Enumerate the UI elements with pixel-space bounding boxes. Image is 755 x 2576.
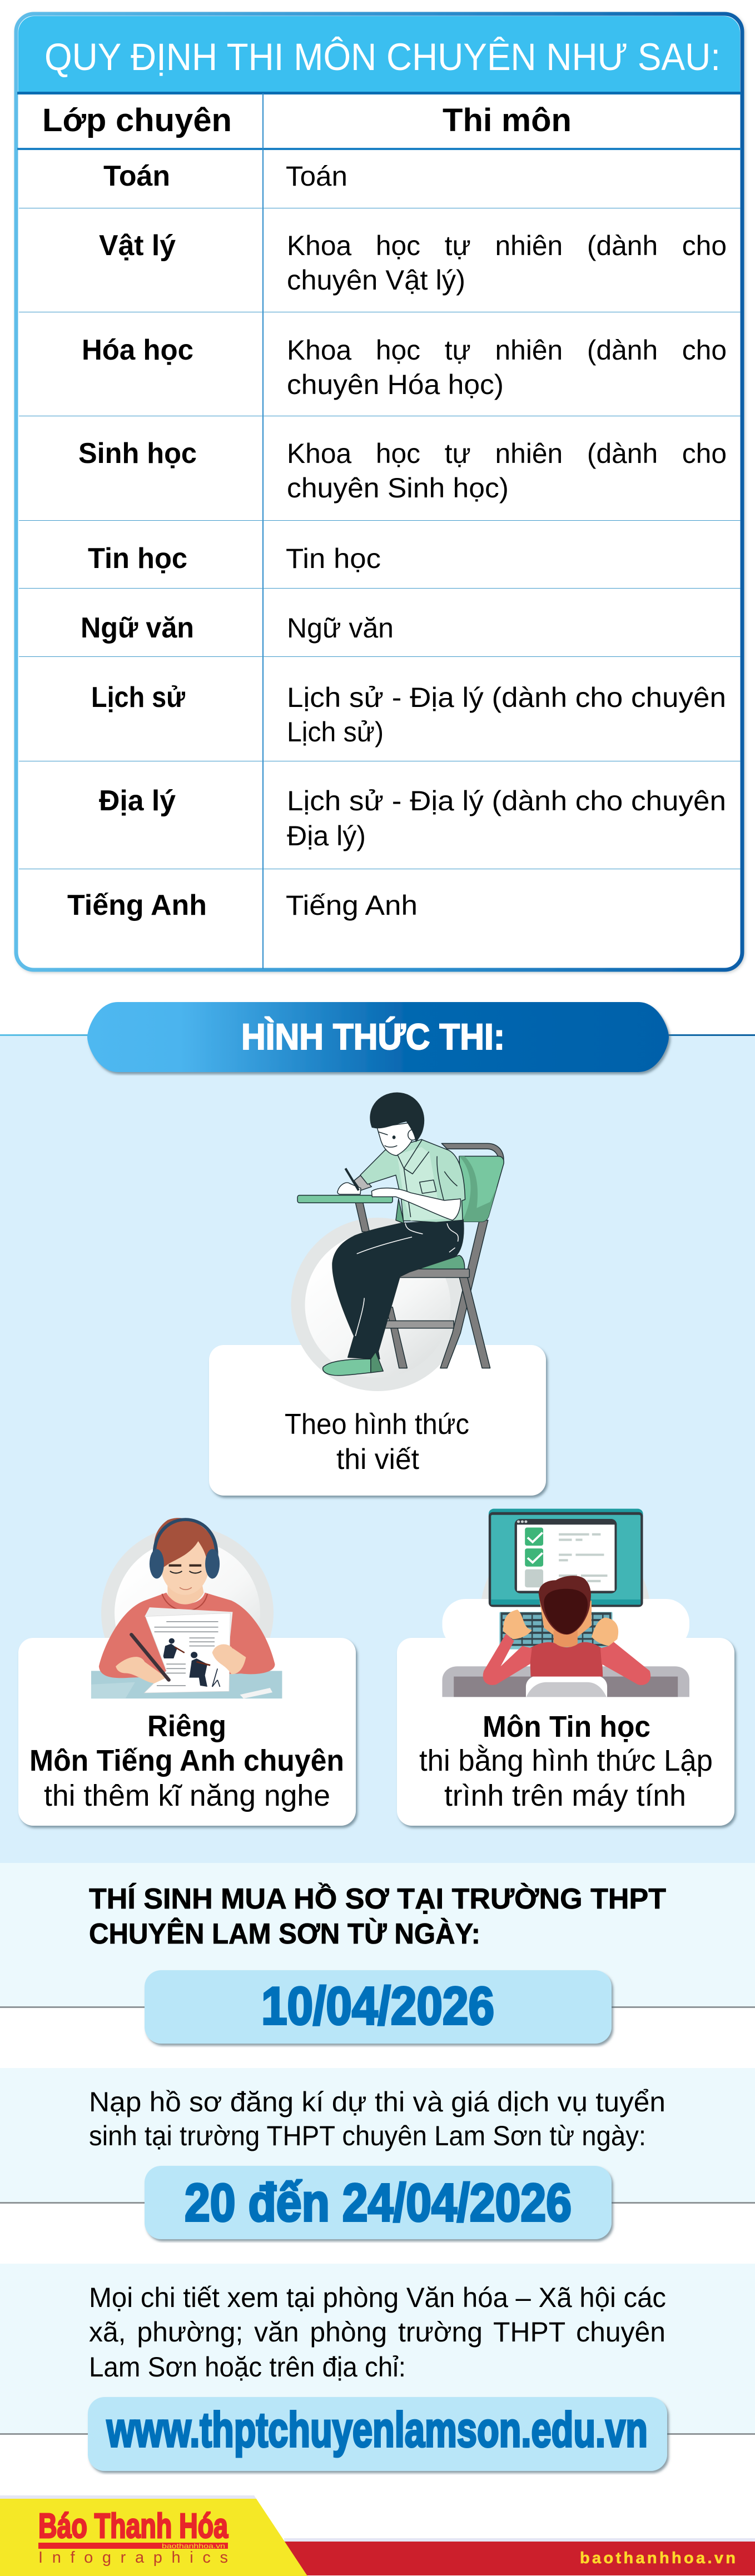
row: Vật lý: Khoa học tự nhiên (dành cho [287,230,727,261]
row: Toán [103,160,347,192]
row: Lịch sử [91,681,726,748]
row: Vật lý: chuyên Vật lý) [287,265,465,296]
column header: Thi môn: Thi môn [443,102,572,138]
row: Hóa học: chuyên Hóa học) [287,369,504,400]
row: Địa lý: Lịch sử - Địa lý (dành cho chuyên [287,785,726,816]
caption: English listening: Riêng [147,1710,226,1743]
row: Tiếng Anh [67,889,418,921]
row: Địa lý: Địa lý) [287,820,366,851]
row: Toán: Toán [103,160,170,192]
row: Hóa học [82,334,727,400]
row: Lịch sử: Lịch sử - Địa lý (dành cho chuyên [287,682,726,713]
row: Toán: Toán [286,161,347,192]
row: Sinh học [78,437,727,504]
information text [89,2282,666,2383]
row: Địa lý [99,785,726,851]
illustration: student writing at desk [291,1093,504,1391]
card: computing exam [397,1599,734,1826]
table title: QUY ĐỊNH THI MÔN CHUYÊN NHƯ SAU: [44,36,721,78]
illustration backdrop: computer disc [480,1528,650,1698]
submission text: sinh tại trường THPT chuyên Lam Sơn từ ngày: [89,2120,646,2151]
caption: English listening: Môn Tiếng Anh chuyên [29,1744,344,1777]
panel: exam format [0,1002,755,1863]
card: written exam [209,1345,546,1496]
submission text [89,2086,665,2151]
caption: English listening: thi thêm kĩ năng nghe [44,1779,330,1812]
caption: written exam [285,1408,469,1476]
row: Địa lý: Địa lý [99,785,176,817]
row: Ngữ văn [81,612,394,644]
row: Lịch sử: Lịch sử) [287,716,384,748]
row: Tin học: Tin học [286,543,381,574]
submission text: Nạp hồ sơ đăng kí dự thi và giá dịch vụ tuyển [89,2086,665,2117]
date pill: 10/04/2026: 10/04/2026 [261,1976,494,2036]
caption: computing exam: trình trên máy tính [444,1779,686,1812]
row: Tin học [88,542,381,575]
row: Vật lý: Vật lý [99,230,176,262]
caption: computing exam: thi bằng hình thức Lập [419,1744,713,1777]
purchase heading: CHUYÊN LAM SƠN TỪ NGÀY: [89,1917,480,1950]
row: Hóa học: Khoa học tự nhiên (dành cho [287,335,727,366]
footer website: baothanhhoa.vn [580,2549,736,2567]
information text: Mọi chi tiết xem tại phòng Văn hóa – Xã hội các [89,2282,666,2313]
caption: English listening [29,1710,344,1812]
date pill: 10/04/2026 [145,1970,612,2044]
panel: application submission [0,2068,755,2239]
information text: xã, phường; văn phòng trường THPT chuyên [89,2316,665,2348]
information text: Lam Sơn hoặc trên địa chỉ: [89,2351,406,2383]
footer [0,2495,755,2576]
row: Hóa học: Hóa học [82,334,193,366]
row: Ngữ văn: Ngữ văn [81,612,194,644]
date pill: 20 đến 24/04/2026: 20 đến 24/04/2026 [185,2173,572,2233]
card: English listening [18,1638,356,1826]
footer logo: baothanhhoa.vn [162,2542,225,2550]
panel: purchase date [0,1863,755,2044]
purchase heading: THÍ SINH MUA HỒ SƠ TẠI TRƯỜNG THPT [89,1882,666,1915]
illustration backdrop: listening disc [101,1527,274,1699]
caption: computing exam [419,1710,713,1812]
row: Lịch sử: Lịch sử [91,681,185,714]
footer logo: Infographics [38,2549,228,2567]
row: Sinh học: Khoa học tự nhiên (dành cho [287,438,727,469]
panel: further information [0,2264,755,2471]
row: Tiếng Anh: Tiếng Anh [286,890,418,921]
row: Tin học: Tin học [88,542,187,575]
table title band [18,16,740,92]
panel: exam subject table [16,14,742,970]
column header: Lớp chuyên: Lớp chuyên [42,102,232,138]
row: Vật lý [99,230,727,296]
caption: written exam: Theo hình thức [285,1408,469,1441]
row: Tiếng Anh: Tiếng Anh [67,889,207,921]
purchase heading [89,1882,666,1950]
heading pill: exam format [87,1002,669,1072]
heading pill: exam format: HÌNH THỨC THI: [241,1016,505,1057]
illustration: student at computer [442,1509,689,1697]
website pill [88,2397,667,2471]
caption: computing exam: Môn Tin học [483,1710,650,1743]
footer logo [0,2499,307,2576]
row: Sinh học: chuyên Sinh học) [287,472,509,504]
caption: written exam: thi viết [336,1443,420,1476]
illustration: student with headphones [91,1518,282,1698]
row: Sinh học: Sinh học [78,437,197,470]
row: Ngữ văn: Ngữ văn [287,612,394,644]
footer logo: Báo Thanh Hóa [38,2507,228,2545]
